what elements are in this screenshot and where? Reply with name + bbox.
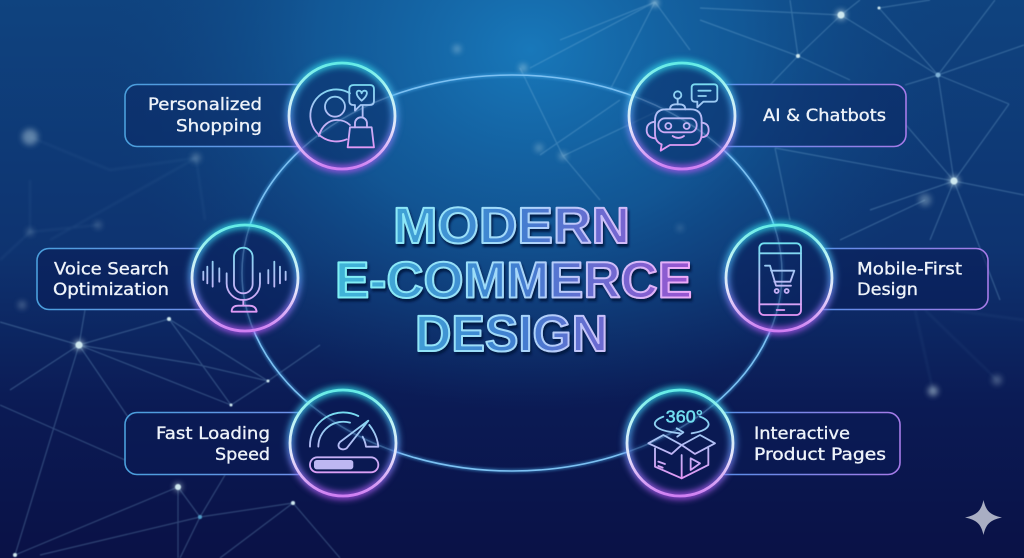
label: voice search optimization: Optimization [53,280,169,300]
ring: interactive product pages [627,390,733,496]
label: personalized shopping: Shopping [176,116,262,136]
ring: personalized shopping [289,63,395,169]
icon: smartphone with shopping cart [759,243,801,315]
label: voice search optimization: Voice Search [54,260,169,280]
title: modern e-commerce design: DESIGN [415,305,608,362]
label: mobile-first design: Design [857,280,918,300]
panel: mobile-first design [823,248,988,310]
label: fast loading speed: Speed [215,445,270,465]
panel: voice search optimization [37,248,201,310]
icon: person with heart bubble and shopping bag [310,85,374,147]
ring: fast loading speed [290,390,396,496]
icon: sparkle watermark [965,500,1002,535]
panel: fast loading speed [125,412,299,475]
label: ai and chatbots: AI & Chatbots [763,106,886,126]
panel: ai and chatbots [726,84,906,147]
title: modern e-commerce design [335,197,692,362]
label: personalized shopping: Personalized [148,95,262,115]
icon: microphone with sound waves [203,248,286,312]
ring: mobile-first design [726,225,832,331]
connecting ellipse [242,75,782,471]
ring: ai and chatbots [629,63,735,169]
icon: 360 degree product box [648,407,715,478]
label: mobile-first design: Mobile-First [857,260,962,280]
label: interactive product pages: Interactive [754,424,850,444]
label: fast loading speed: Fast Loading [156,424,270,444]
360 degree label: 360° [666,407,703,427]
box and rotation arrow [648,417,715,478]
title: modern e-commerce design: MODERN [393,197,630,254]
title: modern e-commerce design: E-COMMERCE [335,252,692,308]
icon: chatbot robot with speech bubble [647,84,717,151]
icon: speedometer with loading bar [310,412,378,472]
label: interactive product pages: Product Pages [754,445,886,465]
panel: interactive product pages [724,412,900,475]
panel: personalized shopping [125,84,298,147]
ring: voice search optimization [192,225,298,331]
